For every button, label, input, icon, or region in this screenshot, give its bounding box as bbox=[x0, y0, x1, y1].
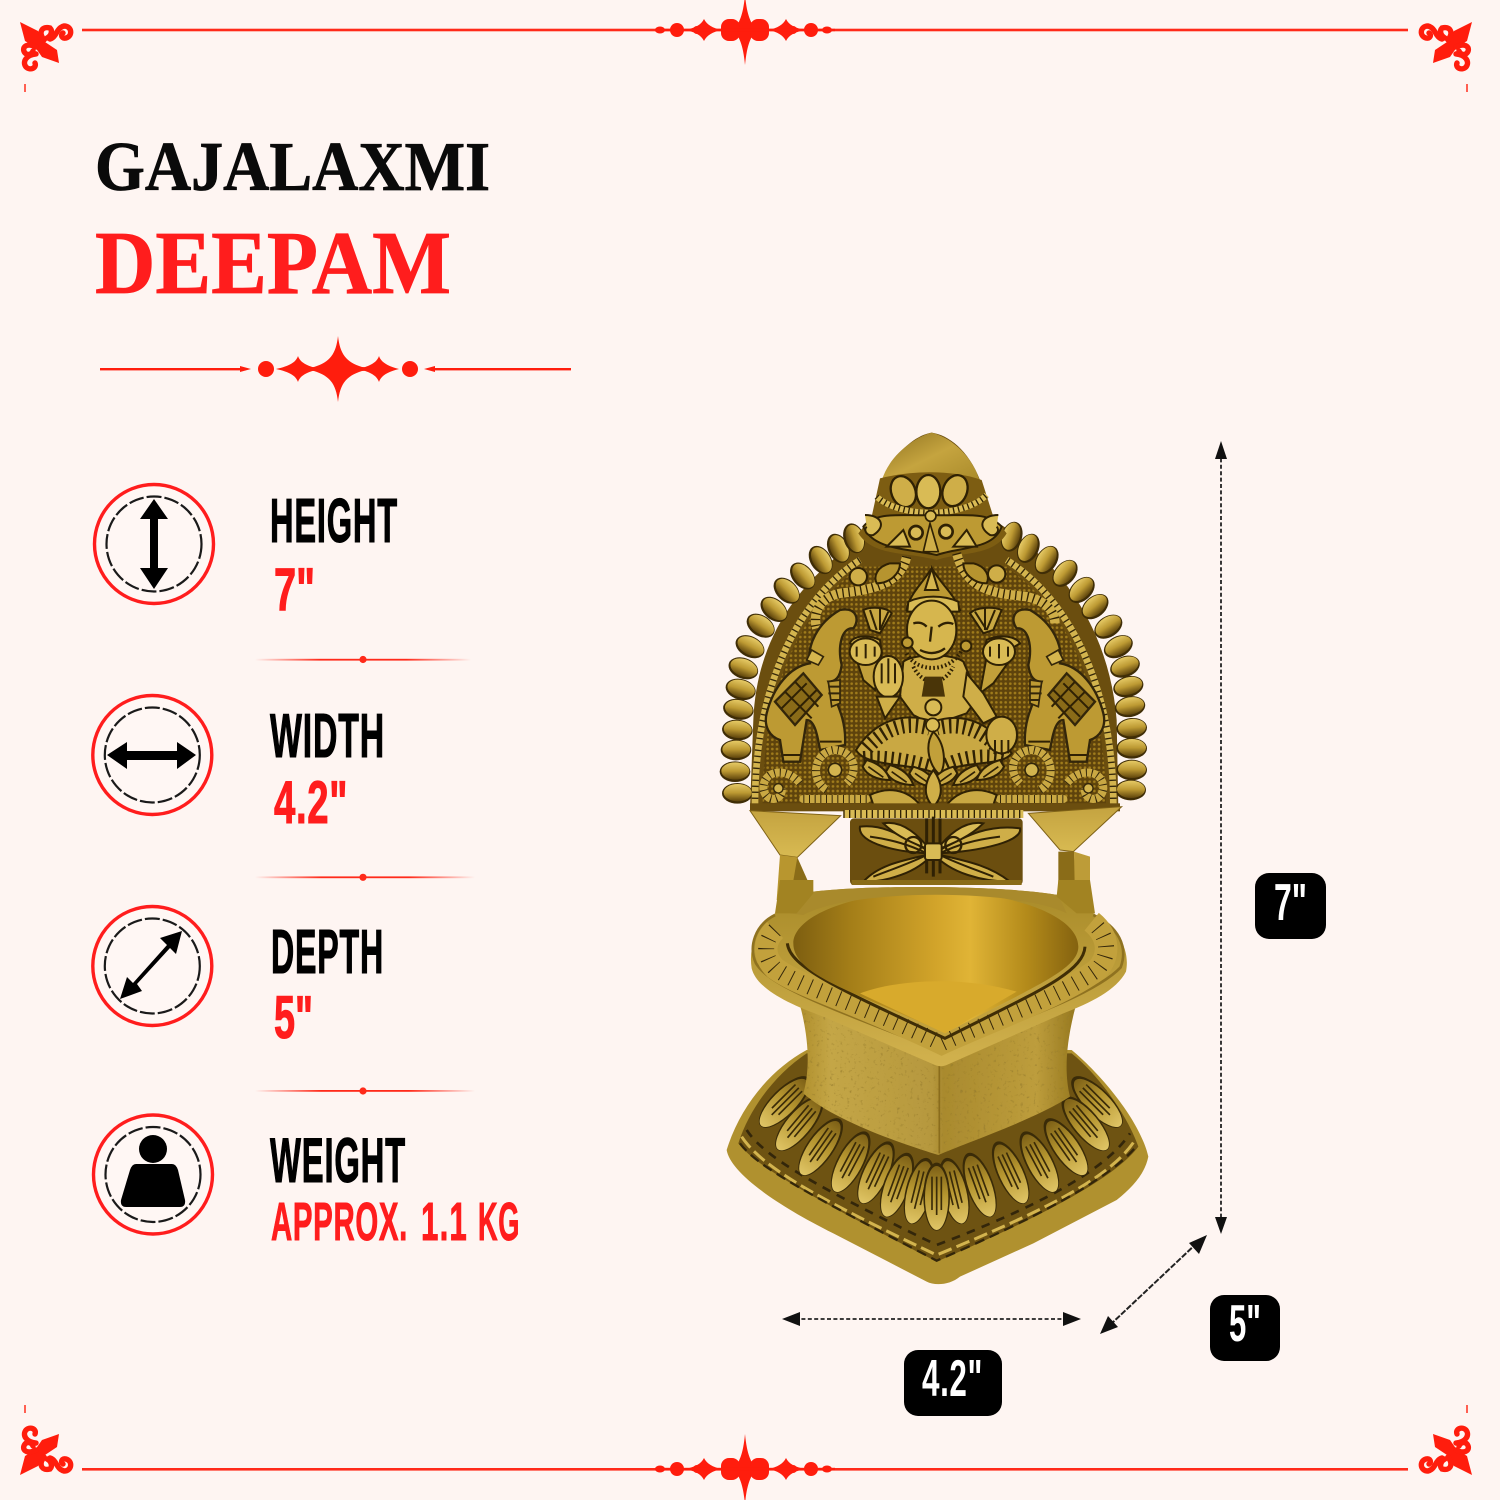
icon: width arrow bbox=[93, 696, 212, 814]
icon: height arrow bbox=[94, 484, 214, 604]
engraved rim surface bbox=[753, 915, 1123, 1051]
icon: depth arrow bbox=[93, 906, 212, 1026]
raised fists and lotuses bbox=[850, 608, 1015, 665]
crown lotus and face bbox=[858, 471, 1007, 560]
badge: width 4.2 inches: 4.2" bbox=[922, 1350, 983, 1408]
bracket feet bbox=[775, 880, 1095, 913]
title bbox=[95, 129, 490, 313]
lamp bowl and base bbox=[727, 880, 1148, 1284]
divider bbox=[255, 874, 475, 881]
spec: depth bbox=[93, 906, 384, 1051]
label: width: WIDTH bbox=[270, 702, 385, 771]
value: approx 1.1 kg: 1.1 bbox=[421, 1192, 468, 1252]
bowl interior bbox=[793, 892, 1078, 1033]
dome finial bbox=[882, 433, 980, 482]
dimension: height line bbox=[1215, 441, 1227, 1234]
dotted plinth bar bbox=[750, 803, 1120, 814]
hanging vines bbox=[815, 553, 1055, 628]
arch plate bbox=[750, 433, 1118, 808]
back ledge bbox=[790, 887, 1067, 915]
dotted inner rim bbox=[755, 560, 1113, 805]
title: DEEPAM bbox=[95, 214, 451, 313]
stem corner edge bbox=[937, 1065, 942, 1153]
label: depth: DEPTH bbox=[271, 918, 384, 987]
icon: weight bbox=[94, 1115, 212, 1234]
badge: width 4.2 inches bbox=[904, 1350, 1002, 1416]
bottom scrolls bbox=[763, 750, 1103, 799]
rim bbox=[751, 887, 1127, 1066]
vine band bbox=[740, 1130, 1137, 1261]
dimension: depth line bbox=[1100, 1235, 1207, 1334]
label: weight: WEIGHT bbox=[270, 1126, 406, 1196]
dimension: width line bbox=[782, 1312, 1081, 1326]
badge: height 7 inches bbox=[1255, 873, 1326, 939]
base lip bbox=[727, 1050, 1148, 1284]
spec: width bbox=[93, 696, 385, 836]
scalloped bead edge bbox=[720, 519, 1148, 804]
stem bbox=[797, 993, 1078, 1155]
panel foot bbox=[852, 880, 1022, 885]
value: 5 inches: 5" bbox=[274, 984, 313, 1051]
title: GAJALAXMI bbox=[95, 129, 490, 206]
ornamental band backing bbox=[738, 1053, 1138, 1262]
label: height: HEIGHT bbox=[270, 487, 398, 556]
divider bbox=[255, 656, 471, 663]
value: 4.2 inches: 4.2" bbox=[274, 769, 348, 836]
lamp back plate with goddess relief bbox=[720, 433, 1148, 900]
petals bbox=[751, 1069, 1130, 1231]
lotus seat bbox=[863, 760, 1004, 807]
value: approx 1.1 kg: KG bbox=[478, 1192, 520, 1252]
value: 7 inches: 7" bbox=[274, 556, 315, 623]
badge: depth 5 inches bbox=[1210, 1295, 1280, 1361]
badge: depth 5 inches: 5" bbox=[1229, 1295, 1261, 1353]
product: brass lamp bbox=[720, 433, 1148, 1284]
spec: height bbox=[94, 484, 398, 623]
goddess figure bbox=[850, 568, 1020, 775]
side brackets bbox=[750, 807, 1122, 900]
textured field bbox=[763, 567, 1106, 803]
flower panel bbox=[850, 817, 1023, 885]
bowl floor bbox=[860, 981, 1017, 1033]
divider bbox=[255, 1087, 475, 1095]
title ornament divider bbox=[100, 336, 571, 402]
badge: height 7 inches: 7" bbox=[1274, 874, 1307, 932]
elephants bbox=[766, 609, 1104, 762]
value: approx 1.1 kg: APPROX. bbox=[271, 1192, 408, 1252]
spec: weight bbox=[94, 1115, 520, 1252]
